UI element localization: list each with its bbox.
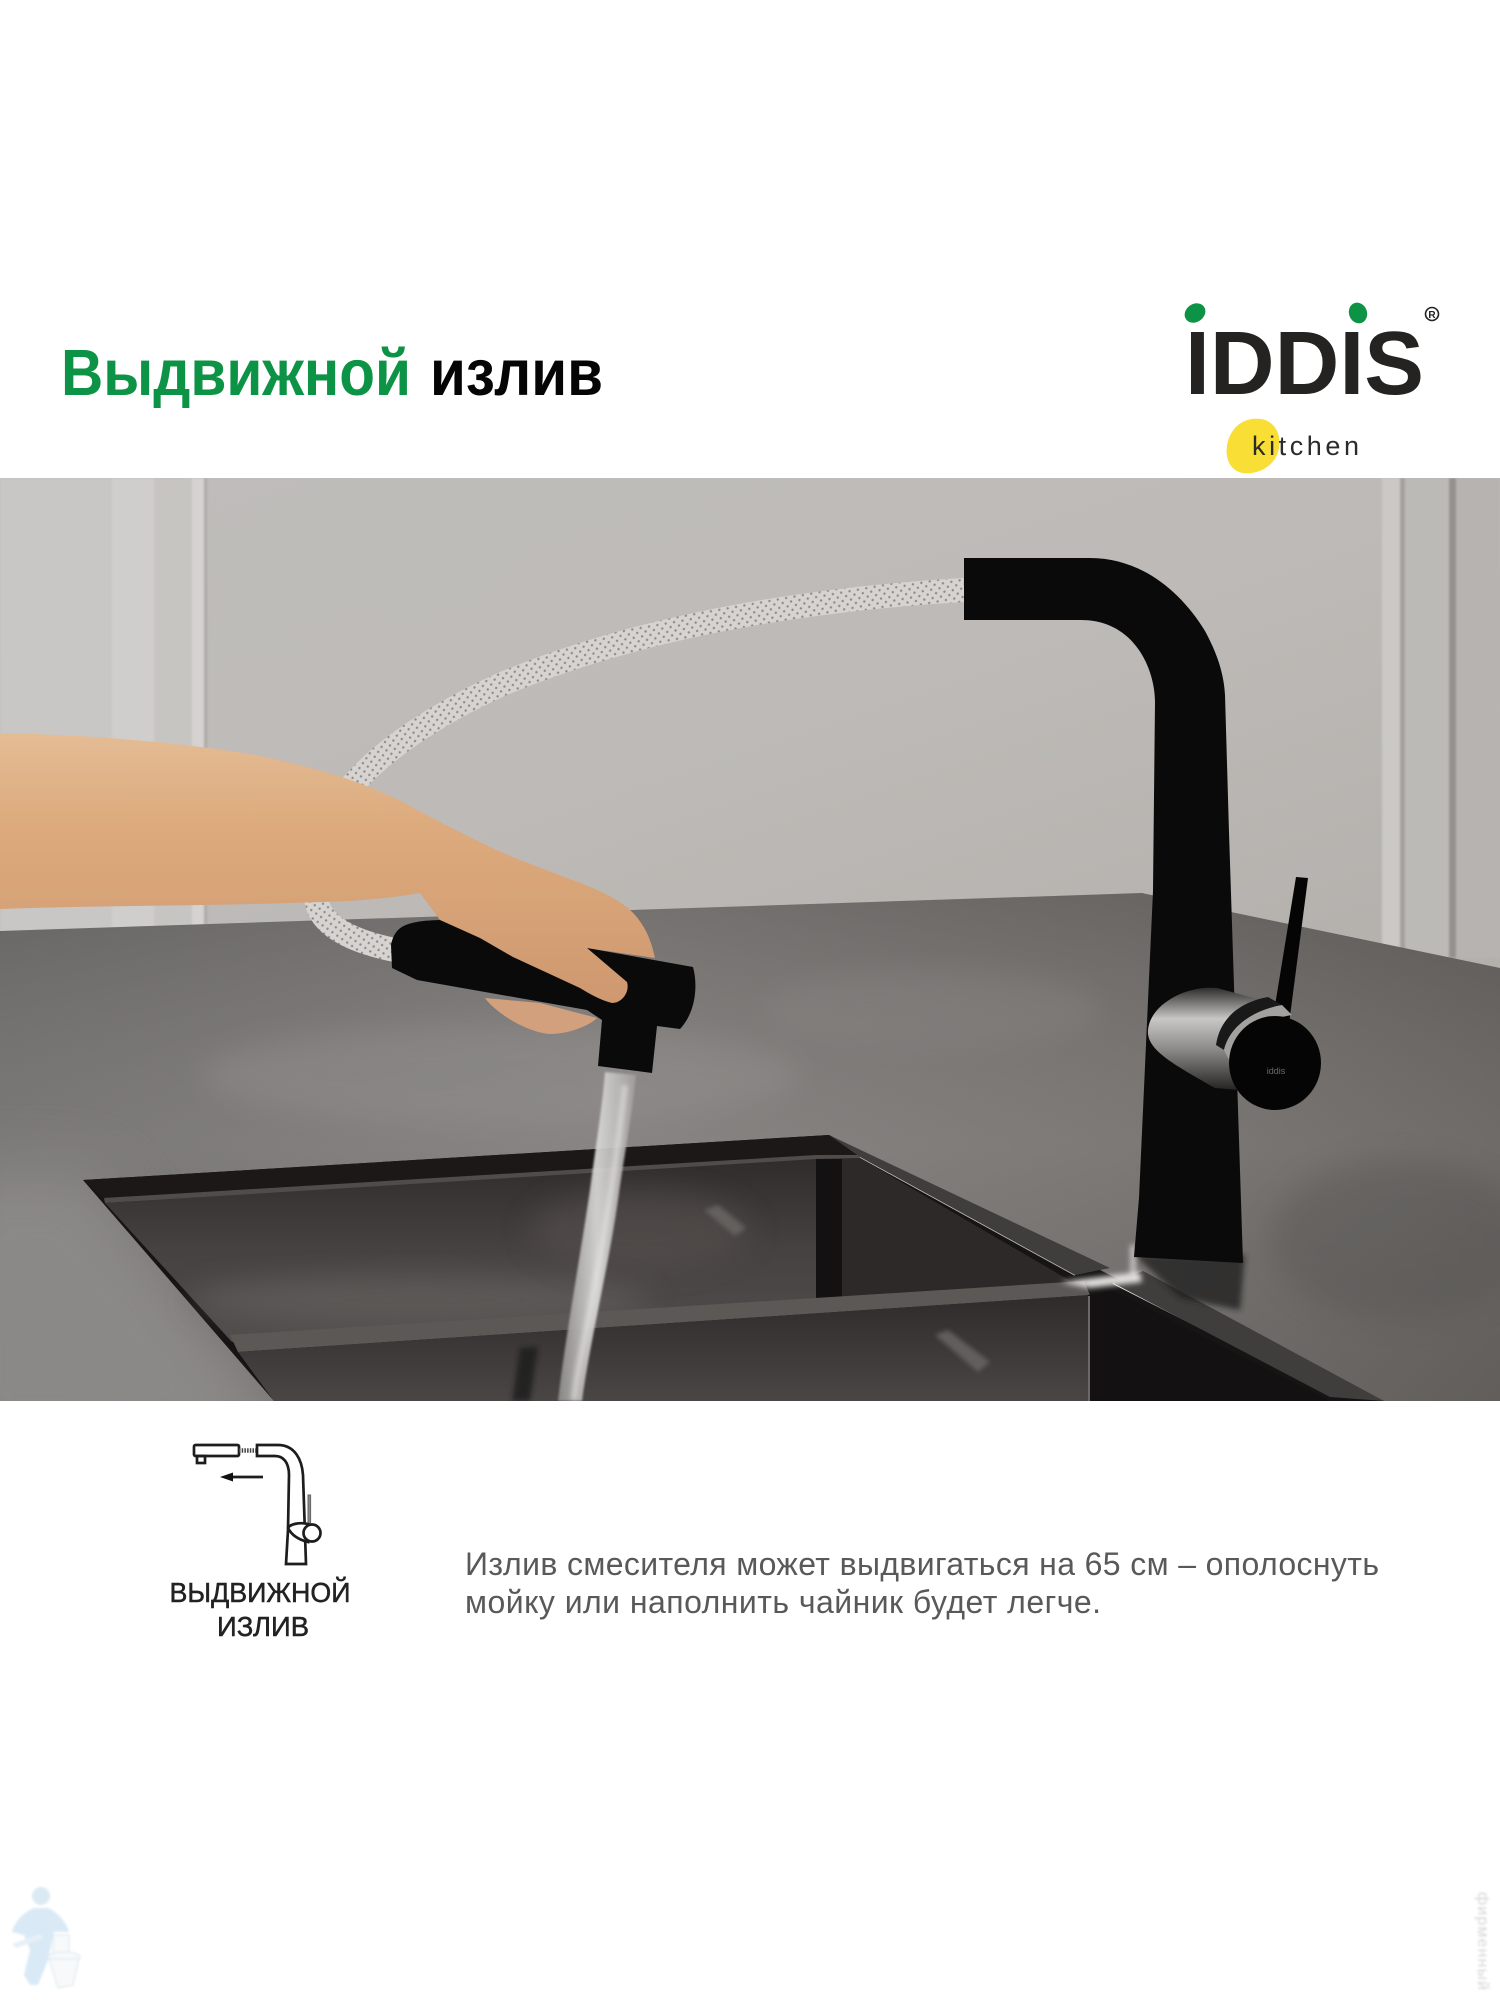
sink granite edge bbox=[829, 1135, 1384, 1401]
logo yellow blob bbox=[1227, 419, 1280, 473]
pull-out hose lower bbox=[316, 880, 395, 950]
icon faucet body bbox=[257, 1445, 306, 1564]
logo wordmark: IDDIS bbox=[1185, 314, 1424, 414]
plumber head bbox=[32, 1887, 50, 1905]
icon: pull-out spout faucet bbox=[194, 1445, 320, 1564]
handle cap mark: iddis bbox=[1267, 1066, 1286, 1076]
photo: hand pulling out faucet spout over sink bbox=[0, 478, 1500, 1460]
faucet handle bbox=[1148, 877, 1321, 1110]
wall mouldings bbox=[0, 478, 1500, 958]
description text: Излив смесителя может выдвигаться на 65 см – ополоснуть bbox=[465, 1546, 1379, 1582]
sink lower basin bbox=[238, 1295, 1090, 1401]
plumber wrench bbox=[12, 1934, 44, 1948]
sink stainless highlight bbox=[860, 1157, 1075, 1275]
handle lever bbox=[1276, 877, 1308, 1018]
title: Выдвижной bbox=[61, 336, 411, 409]
watermark: vertical site text: фирменный bbox=[1474, 1892, 1491, 1990]
handle light band bbox=[1224, 1005, 1292, 1060]
icon nozzle bbox=[197, 1456, 205, 1463]
description text bbox=[465, 1546, 1379, 1620]
title: излив bbox=[430, 336, 603, 409]
pull-out hose upper bbox=[340, 590, 964, 800]
lower fingers bbox=[485, 998, 597, 1034]
countertop bbox=[0, 893, 1500, 1401]
logo registered mark: R bbox=[1428, 310, 1436, 321]
sink upper basin wall bbox=[105, 1159, 816, 1342]
icon label: ВЫДВИЖНОЙ bbox=[170, 1577, 350, 1608]
icon label: ИЗЛИВ bbox=[217, 1611, 309, 1642]
handle metal cylinder bbox=[1148, 988, 1280, 1092]
water stream bbox=[558, 1072, 636, 1401]
sink basin reflection marks bbox=[704, 1205, 990, 1372]
faucet shadow bbox=[1135, 1255, 1245, 1310]
logo green dots bbox=[1181, 299, 1370, 327]
logo registered mark bbox=[1426, 308, 1438, 321]
sink right wall bbox=[816, 1158, 1074, 1300]
handle black cap bbox=[1229, 1016, 1321, 1110]
watermark toilet bbox=[48, 1935, 80, 1988]
watermark: plumber with toilet bbox=[12, 1887, 80, 1988]
handle dark collar bbox=[1216, 997, 1282, 1050]
faucet body bbox=[964, 558, 1243, 1263]
description text: мойку или наполнить чайник будет легче. bbox=[465, 1584, 1101, 1620]
icon lever bbox=[308, 1495, 311, 1525]
icon hose bbox=[239, 1448, 257, 1453]
logo kitchen text: kitchen bbox=[1252, 431, 1359, 461]
edge highlight bbox=[1060, 1245, 1142, 1288]
sink dark right corner bbox=[1088, 1294, 1090, 1296]
sink faucet reflection post bbox=[512, 1347, 538, 1401]
pull-out spray head bbox=[391, 920, 695, 1073]
icon handle bbox=[288, 1523, 320, 1542]
sink bbox=[83, 1135, 1384, 1401]
icon spray head bbox=[194, 1445, 239, 1456]
logo: IDDIS kitchen bbox=[1181, 299, 1438, 473]
arm and hand bbox=[0, 733, 655, 1003]
icon label bbox=[170, 1577, 350, 1642]
water streaks bbox=[574, 1085, 625, 1400]
sink rim bbox=[83, 1135, 830, 1181]
plumber body bbox=[12, 1908, 69, 1985]
sink divider bbox=[230, 1281, 1090, 1352]
wall bbox=[0, 478, 1500, 978]
icon arrow bbox=[220, 1472, 263, 1482]
